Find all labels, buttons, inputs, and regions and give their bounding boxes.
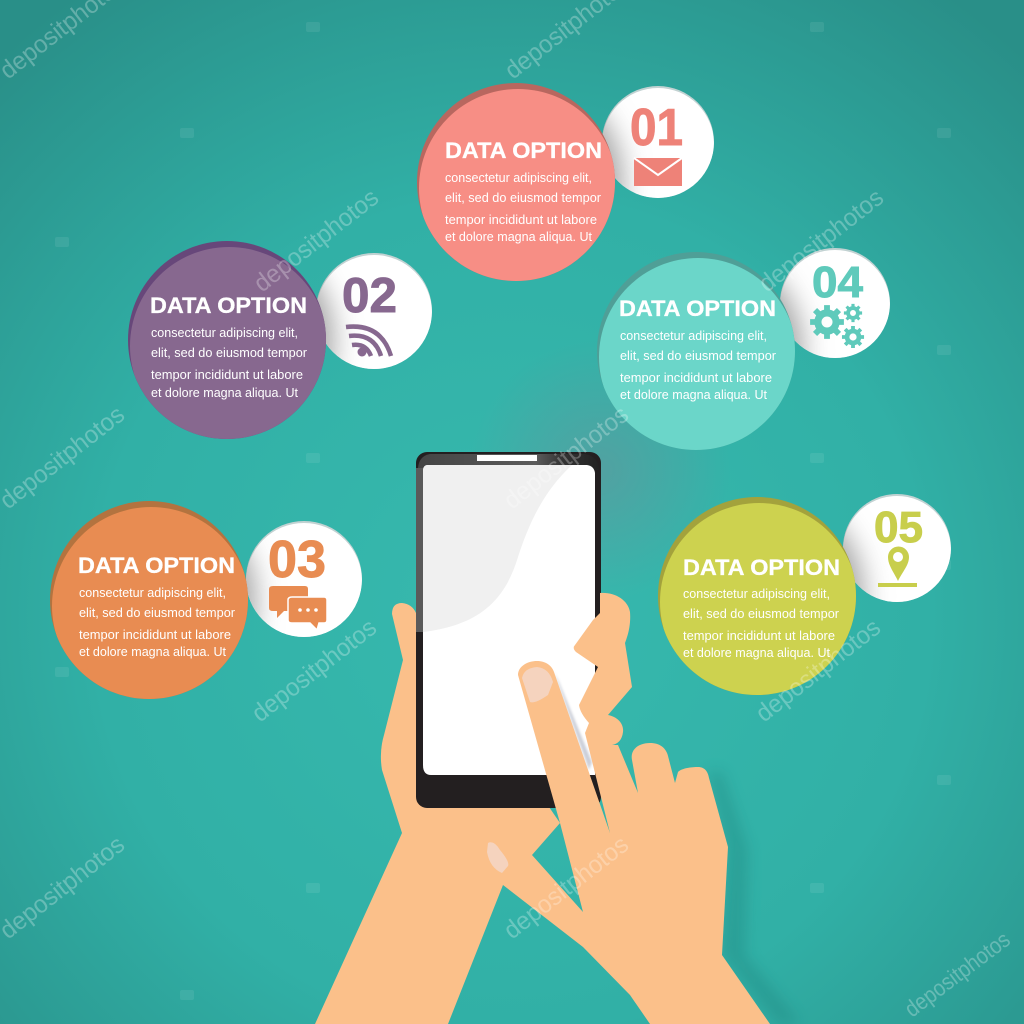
panel: option 03: elit, sed do eiusmod tempor bbox=[79, 606, 235, 620]
badge 05 bbox=[843, 494, 951, 602]
panel: option 02: consectetur adipiscing elit, bbox=[151, 326, 298, 340]
screen reflection bbox=[423, 465, 572, 632]
panel: option 01: et dolore magna aliqua. Ut bbox=[445, 230, 593, 244]
phone top bezel bbox=[418, 454, 599, 470]
panel: option 03: et dolore magna aliqua. Ut bbox=[79, 645, 227, 659]
badge 02 bbox=[317, 253, 432, 369]
watermark: depositphotos bbox=[498, 830, 634, 945]
panel: option 04 bbox=[590, 245, 890, 457]
panel: option 02: elit, sed do eiusmod tempor bbox=[151, 346, 307, 360]
panel: option 05: tempor incididunt ut labore bbox=[683, 629, 835, 643]
panel: option 03: DATA OPTION bbox=[78, 553, 235, 578]
badge 05: 05 bbox=[874, 503, 923, 552]
watermark: depositphotos bbox=[750, 613, 886, 728]
watermark: depositphotos bbox=[498, 400, 634, 515]
phone left bezel bbox=[416, 468, 423, 632]
panel: option 02: tempor incididunt ut labore bbox=[151, 368, 303, 382]
panel: option 01: consectetur adipiscing elit, bbox=[445, 171, 592, 185]
watermark: depositphotos bbox=[753, 183, 889, 298]
watermark: depositphotos bbox=[248, 183, 384, 298]
screen bbox=[423, 465, 595, 775]
panel: option 05 bbox=[651, 490, 951, 702]
panel: option 03 bbox=[43, 494, 362, 706]
panel: option 03: tempor incididunt ut labore bbox=[79, 628, 231, 642]
panel: option 01: elit, sed do eiusmod tempor bbox=[445, 191, 601, 205]
icon: gears bbox=[810, 304, 864, 348]
phone glow bbox=[470, 340, 730, 600]
badge 04: 04 bbox=[812, 258, 864, 307]
left hand fingers bbox=[574, 593, 632, 745]
panel: option 02: et dolore magna aliqua. Ut bbox=[151, 386, 299, 400]
panel: option 02: DATA OPTION bbox=[150, 293, 307, 318]
badge 02: 02 bbox=[342, 269, 397, 323]
icon: chat bubbles bbox=[269, 586, 327, 630]
panel: option 01: tempor incididunt ut labore bbox=[445, 213, 597, 227]
watermark: depositphotos bbox=[246, 613, 382, 728]
panel: option 04: DATA OPTION bbox=[619, 296, 776, 321]
badge 03: 03 bbox=[268, 531, 326, 589]
shadow of hands bbox=[708, 772, 800, 1024]
icon: wifi bbox=[346, 327, 391, 356]
icon: map pin bbox=[878, 546, 917, 587]
badge 01 bbox=[602, 86, 714, 198]
panel: option 05: consectetur adipiscing elit, bbox=[683, 587, 830, 601]
icon: fingernail bbox=[522, 667, 553, 702]
speaker bbox=[477, 455, 537, 461]
panel: option 04: et dolore magna aliqua. Ut bbox=[620, 388, 768, 402]
panel: option 05: DATA OPTION bbox=[683, 555, 840, 580]
panel: option 05: et dolore magna aliqua. Ut bbox=[683, 646, 831, 660]
finger shadow bbox=[554, 672, 592, 770]
badge 03 bbox=[246, 521, 362, 637]
phone bbox=[416, 452, 601, 808]
panel: option 02 bbox=[121, 234, 432, 446]
badge 04 bbox=[780, 248, 890, 358]
panel: option 05: elit, sed do eiusmod tempor bbox=[683, 607, 839, 621]
panel: option 04: elit, sed do eiusmod tempor bbox=[620, 349, 776, 363]
badge 01: 01 bbox=[630, 99, 683, 157]
panel: option 01 bbox=[410, 76, 714, 288]
left hand bbox=[315, 603, 560, 1024]
panel: option 01: DATA OPTION bbox=[445, 138, 602, 163]
right hand bbox=[490, 661, 770, 1024]
panel: option 04: consectetur adipiscing elit, bbox=[620, 329, 767, 343]
icon: thumbnail bbox=[487, 842, 508, 873]
panel: option 03: consectetur adipiscing elit, bbox=[79, 586, 226, 600]
icon: envelope bbox=[634, 158, 682, 186]
panel: option 04: tempor incididunt ut labore bbox=[620, 371, 772, 385]
